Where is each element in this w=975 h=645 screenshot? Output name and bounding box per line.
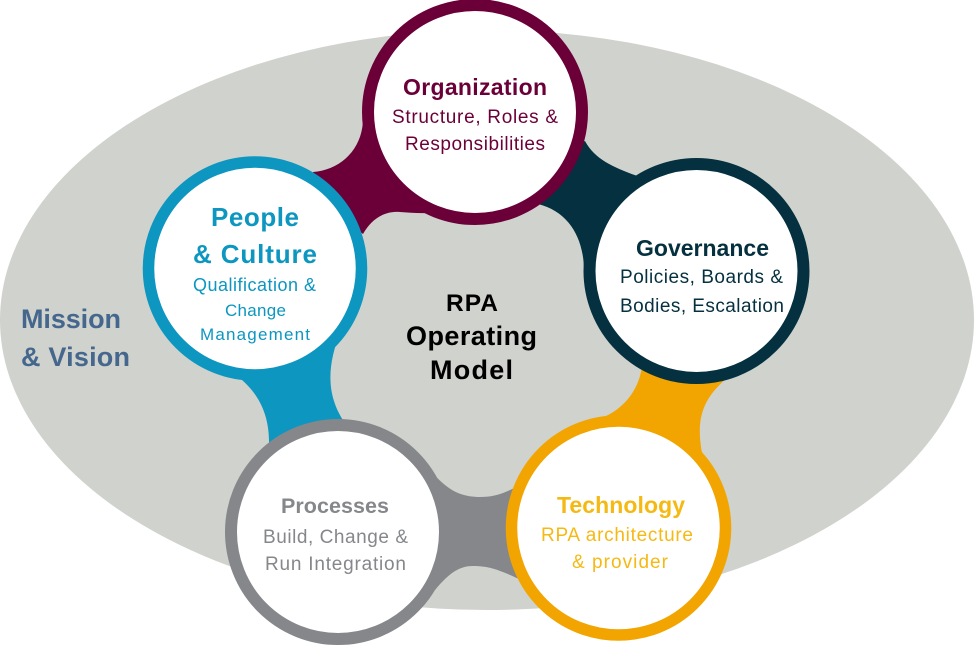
people heading: People [211, 202, 299, 232]
node: technology [512, 421, 726, 635]
center title [406, 290, 537, 385]
technology description [541, 525, 693, 573]
node: governance [590, 164, 804, 378]
node: processes [231, 425, 445, 639]
organization heading: Organization [403, 74, 547, 100]
node: people and culture [148, 162, 362, 375]
people heading [193, 202, 317, 269]
center title: Operating [406, 321, 537, 351]
node: organization [368, 5, 582, 219]
processes description: Build, Change & [263, 527, 408, 548]
governance description: Bodies, Escalation [620, 296, 784, 317]
connector: people to organization [313, 120, 442, 234]
organization description [392, 107, 558, 155]
processes description: Run Integration [265, 554, 406, 575]
label: mission and vision: & Vision [21, 342, 130, 372]
connector: processes to people [232, 328, 350, 445]
governance heading: Governance [636, 235, 769, 261]
center title: Model [430, 355, 513, 385]
people description [193, 275, 316, 344]
label: mission and vision [21, 304, 130, 372]
organization description: Responsibilities [405, 134, 545, 155]
connector: technology to processes [418, 458, 525, 590]
center title: RPA [446, 290, 498, 317]
governance description: Policies, Boards & [620, 267, 783, 288]
processes description [263, 527, 408, 575]
people description: Change [225, 301, 286, 320]
organization description: Structure, Roles & [392, 107, 558, 128]
people heading: & Culture [193, 239, 317, 269]
people description: Qualification & [193, 275, 316, 295]
people description: Management [200, 325, 310, 344]
label: mission and vision: Mission [21, 304, 121, 334]
technology description: RPA architecture [541, 525, 693, 546]
connector: organization to governance [520, 141, 640, 275]
processes heading: Processes [281, 494, 389, 518]
technology description: & provider [572, 552, 669, 573]
connector: governance to technology [595, 362, 727, 472]
governance description [620, 267, 784, 317]
technology heading: Technology [557, 492, 685, 518]
